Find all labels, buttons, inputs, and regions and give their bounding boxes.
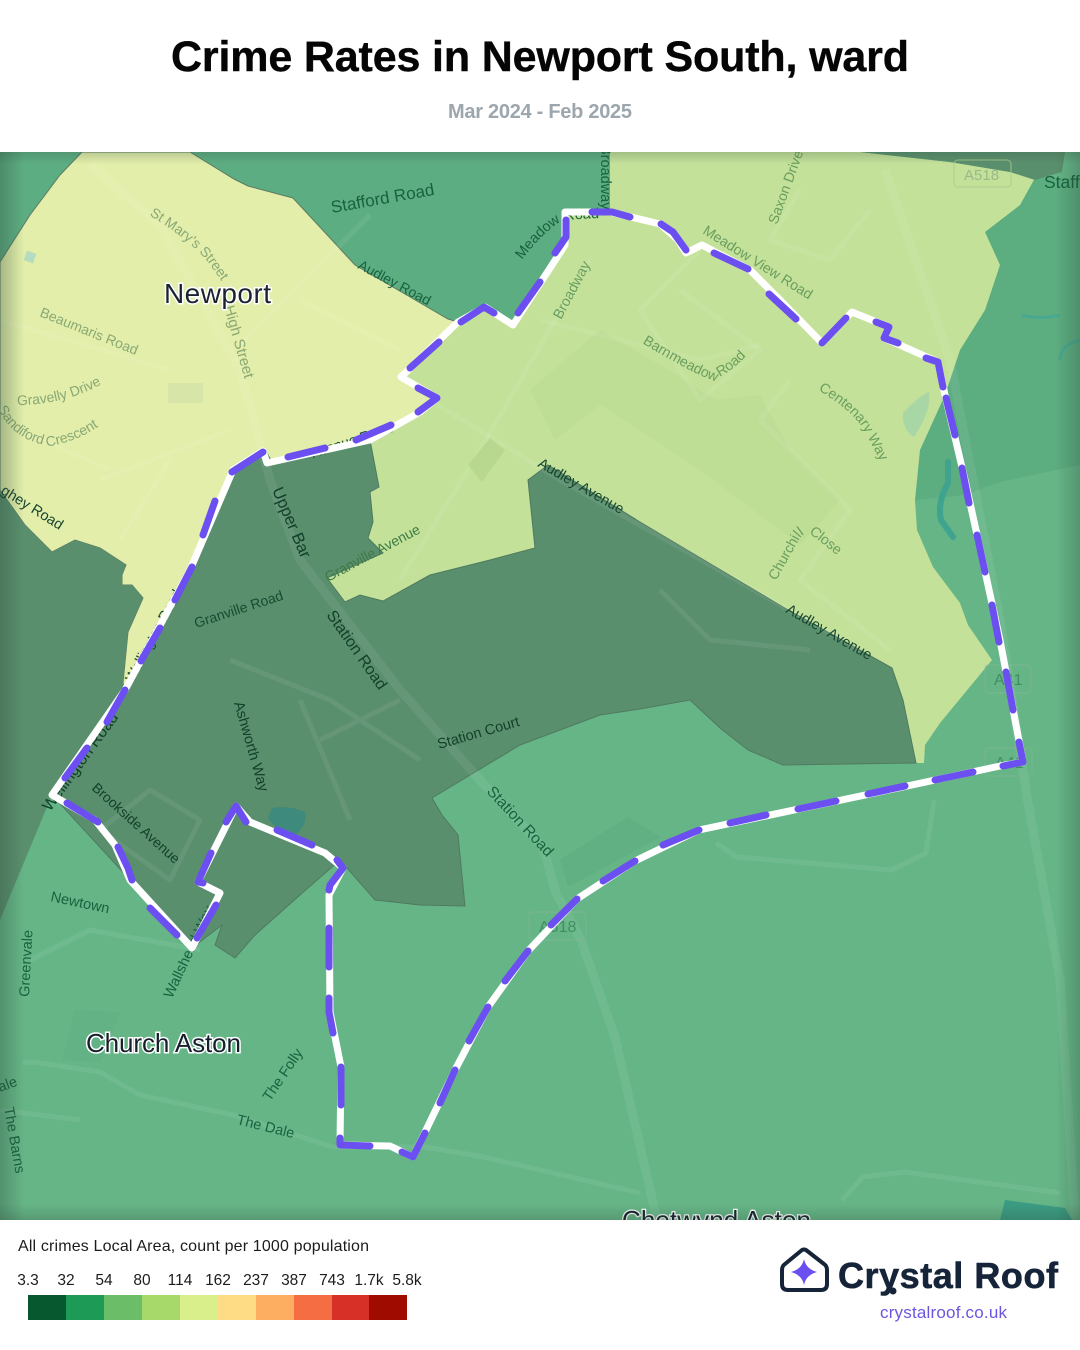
road labels on green areas: Ashworth Way xyxy=(230,700,271,794)
road labels on green areas: Greenvale xyxy=(17,930,36,997)
region: west dark green xyxy=(0,490,143,920)
road labels on green areas: Stafford Road xyxy=(329,180,436,217)
road labels on yellow area: St Mary's Street xyxy=(150,208,228,281)
road shields: A41 xyxy=(995,755,1024,772)
road labels on yellow area: Gravelly Drive xyxy=(18,378,100,406)
road labels on green areas: Wellington Road xyxy=(39,710,122,814)
legend value labels: 743 xyxy=(319,1272,345,1289)
road labels on yellow area: High Street xyxy=(220,303,257,381)
region: east green area xyxy=(915,178,1080,500)
legend value labels: 114 xyxy=(168,1272,193,1289)
website url: crystalroof.co.uk xyxy=(880,1303,1008,1322)
legend xyxy=(17,1238,422,1320)
road labels on light green area: Saxon Drive xyxy=(766,148,807,226)
legend value labels xyxy=(17,1272,422,1289)
road labels on green areas xyxy=(0,152,1080,1173)
subtitle: date range: Mar 2024 - Feb 2025 xyxy=(448,101,632,123)
place name: Newport: Newport xyxy=(164,278,271,309)
icon: key on letter y xyxy=(890,1288,896,1294)
legend value labels: 387 xyxy=(281,1272,307,1289)
region: darker field south xyxy=(560,817,661,887)
road labels on green areas: Granville Avenue xyxy=(322,521,423,585)
road labels on light green area: A518 xyxy=(964,167,999,184)
road labels on green areas: Granville Road xyxy=(192,587,285,631)
road labels on light green area: Centenary Way xyxy=(820,384,887,459)
place name: Chetwynd Aston: Chetwynd Aston xyxy=(622,1205,811,1235)
road labels on light green area: Meadow View Road xyxy=(700,223,815,303)
title: Crime Rates in Newport South, ward xyxy=(171,33,909,81)
legend title: All crimes Local Area, count per 1000 population xyxy=(18,1238,369,1255)
road labels on light green area: Broadway xyxy=(550,258,595,322)
map edge vignette xyxy=(0,152,1080,1220)
road labels on green areas: Upper Bar xyxy=(268,485,314,561)
road labels on green areas: Wallshead Way xyxy=(161,903,218,1001)
place name: Church Aston: Church Aston xyxy=(86,1028,241,1058)
brand logo xyxy=(782,1250,1059,1322)
region: darker field Church Aston xyxy=(62,1010,120,1062)
road labels on yellow area: Beaumaris Road xyxy=(38,304,141,358)
legend value labels: 162 xyxy=(205,1272,231,1289)
region: darker lots in light green area xyxy=(530,330,840,545)
legend value labels: 80 xyxy=(133,1272,151,1289)
legend colour scale xyxy=(28,1295,407,1320)
road labels on green areas: Newtown xyxy=(49,889,111,917)
road network xyxy=(0,165,1075,1220)
region: north-east dark strip xyxy=(860,152,1065,180)
icon: house with star xyxy=(782,1250,827,1290)
legend value labels: 1.7k xyxy=(354,1272,384,1289)
road shields: A41 xyxy=(994,672,1023,689)
road labels on green areas: The Barns xyxy=(0,1106,27,1175)
road labels on green areas: Audley Avenue xyxy=(783,602,875,664)
ward boundary, dashed white and purple line xyxy=(52,212,1023,1157)
road labels on green areas: Broadway xyxy=(597,145,613,210)
legend value labels: 237 xyxy=(243,1272,269,1289)
road labels on green areas: Meadow Road xyxy=(514,208,598,259)
road labels on green areas: Avenue Road xyxy=(309,419,394,461)
road labels on light green area: Barnmeadow Road xyxy=(643,336,746,381)
road labels on green areas: Brookside Avenue xyxy=(89,779,184,867)
road shields: A518 xyxy=(539,919,576,936)
legend value labels: 54 xyxy=(95,1272,113,1289)
road labels on green areas: Audley Avenue xyxy=(535,456,627,518)
road labels on green areas: Station Road xyxy=(483,783,557,860)
road labels on green areas: The Folly xyxy=(260,1045,307,1104)
legend value labels: 32 xyxy=(57,1272,75,1289)
road labels on green areas: The Dale xyxy=(235,1112,296,1142)
road labels on yellow area xyxy=(0,208,254,446)
road labels on green areas: Station Road xyxy=(323,608,390,693)
legend value labels: 3.3 xyxy=(17,1272,39,1289)
road shields xyxy=(529,160,1032,940)
region: central dark green xyxy=(52,440,916,958)
road labels on light green area: Churchill Close xyxy=(769,526,840,579)
road labels on green areas: Audley Road xyxy=(356,257,434,308)
road labels on green areas: Station Court xyxy=(436,714,521,753)
road labels on light green area xyxy=(553,152,998,579)
brand name: Crystal Roof xyxy=(838,1255,1059,1296)
region: Newport centre, yellow xyxy=(0,152,458,690)
region: east Newport, light green xyxy=(327,152,1035,763)
parks and water xyxy=(24,251,1080,1220)
legend value labels: 5.8k xyxy=(392,1272,422,1289)
road labels on green areas: Wellington Road xyxy=(122,587,185,684)
region: north green area xyxy=(0,152,610,325)
